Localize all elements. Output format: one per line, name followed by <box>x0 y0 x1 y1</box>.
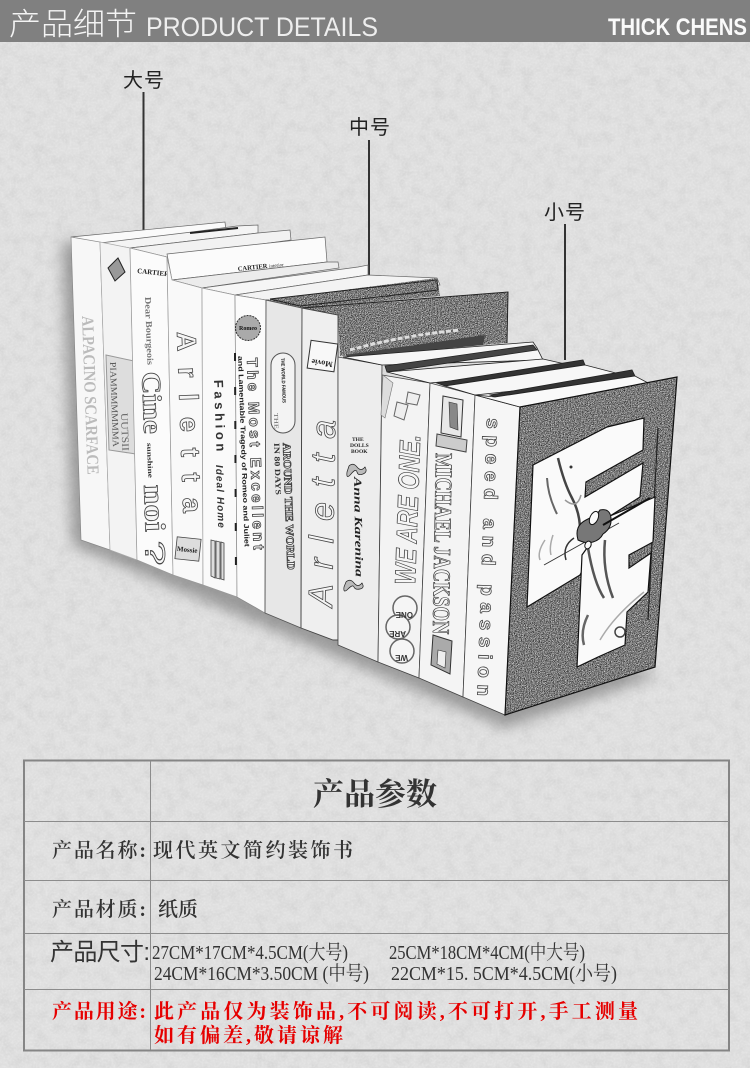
spine: Around the World <box>265 300 302 628</box>
spine: Arletta: Mossie <box>177 545 198 555</box>
label: large: 大号 <box>123 69 164 92</box>
cover art: lower panel <box>577 497 655 667</box>
row: dimensions: 22CM*15. 5CM*4.5CM(小号) <box>391 962 617 985</box>
spine: book two: PIAMMMMMMMA <box>108 362 121 448</box>
spine: Anna Karenina: THE <box>352 437 364 443</box>
spine: The Most Excellent: and Lamentable Tragedy of Romeo and Juliet <box>236 356 250 548</box>
round emblem <box>236 316 260 340</box>
row: material <box>52 898 198 921</box>
row: dimensions: 27CM*17CM*4.5CM(大号) <box>152 941 348 964</box>
spine: Around the World: THE <box>272 413 279 430</box>
front cover <box>505 377 677 715</box>
row: dimensions: 产品尺寸: <box>50 939 150 966</box>
spine: WE ARE ONE: WE ARE ONE. <box>390 434 427 585</box>
spine: Anna Karenina: Anna Karenina <box>351 475 365 578</box>
spine: Fashion <box>202 288 237 597</box>
table title: 产品参数 <box>313 777 437 812</box>
spine: Arletta large: Arletta <box>302 420 343 609</box>
row: dimensions: 24CM*16CM*3.50CM (中号) <box>154 962 369 985</box>
spine: book two <box>100 242 137 560</box>
spine: speed and passion <box>463 395 520 715</box>
spine: Arletta large <box>301 308 343 640</box>
label: small: 小号 <box>544 201 585 224</box>
spine: Cine noi: CARTIER <box>137 267 170 278</box>
sticker circles: ONE <box>395 610 413 619</box>
sticker circles: ARE <box>388 629 406 638</box>
spine: Around the World: IN 80 DAYS <box>272 443 283 496</box>
drop shadow <box>62 240 660 728</box>
header title chinese: 产品细节 <box>9 7 137 42</box>
icon: paint palette <box>577 498 650 550</box>
spine: speed and passion: speed and passion <box>472 418 503 696</box>
parameter table <box>24 760 729 1050</box>
spine: Cine noi: Cine <box>136 371 168 434</box>
row: name: 现代英文简约装饰书 <box>153 839 353 862</box>
row: usage warning: 如有偏差,敬请谅解 <box>154 1023 343 1047</box>
row: usage warning: 产品用途: <box>52 1000 146 1023</box>
row: material: 产品材质: <box>52 898 146 921</box>
row: dimensions <box>50 939 617 985</box>
spine: The Most Excellent: Romeo <box>239 326 257 332</box>
row: dimensions: 25CM*18CM*4CM(中大号) <box>389 941 585 964</box>
spine: Arletta large: Movie <box>310 357 333 369</box>
spine: Arletta <box>167 257 207 585</box>
book tops front <box>343 342 650 407</box>
spine: ALPACINO SCARFACE <box>71 237 110 550</box>
row: material: 纸质 <box>158 898 198 921</box>
spine: Cine noi <box>130 248 173 575</box>
spine: WE ARE ONE <box>378 375 430 678</box>
row: usage warning: 此产品仅为装饰品,不可阅读,不可打开,手工测量 <box>154 1000 638 1023</box>
cover art: upper panel <box>527 418 644 607</box>
cartier caption on page block: CARTIER interior <box>237 261 284 273</box>
book stack <box>62 222 677 728</box>
spine: The Most Excellent: The Most Excellent <box>243 358 267 550</box>
book tops rear <box>71 222 440 300</box>
spine: Anna Karenina: DOLLS <box>350 443 369 449</box>
spine: Fashion: Ideal Home <box>213 465 226 529</box>
cover art: sketched faces <box>539 458 644 645</box>
spine: book two: UUTSII <box>118 413 130 451</box>
spine: Cine noi: Dear Bourgeois <box>143 297 155 366</box>
row: name: 产品名称: <box>52 839 146 862</box>
header bar <box>0 0 750 42</box>
label: medium: 中号 <box>349 116 390 139</box>
spine: Fashion: Fashion <box>211 380 229 453</box>
spine: Cine noi: ? <box>139 540 171 566</box>
spine: Anna Karenina <box>338 357 382 662</box>
dark book interiors <box>266 278 440 308</box>
spine: Around the World: THE WORLD FAMOUS <box>279 358 287 404</box>
spine: Cine noi: noi <box>137 484 171 532</box>
spine: Michael Jackson <box>419 383 475 697</box>
spine: Around the World: AROUND THE WORLD <box>280 443 296 570</box>
spine: ALPACINO SCARFACE: ALPACINO SCARFACE <box>78 315 103 475</box>
sticker circles <box>386 596 417 663</box>
header title english: PRODUCT DETAILS <box>146 12 378 42</box>
spine: Anna Karenina: BOOK <box>351 449 368 455</box>
spine: The Most Excellent <box>235 295 267 613</box>
sticker circles: WE <box>394 653 408 662</box>
spine: Cine noi: sunshine <box>145 443 154 478</box>
row: usage warning <box>52 1000 638 1047</box>
spine: Michael Jackson: MICHAEL JACKSON <box>427 453 456 635</box>
spine: Arletta: Arletta <box>171 331 207 514</box>
row: name <box>52 839 353 862</box>
